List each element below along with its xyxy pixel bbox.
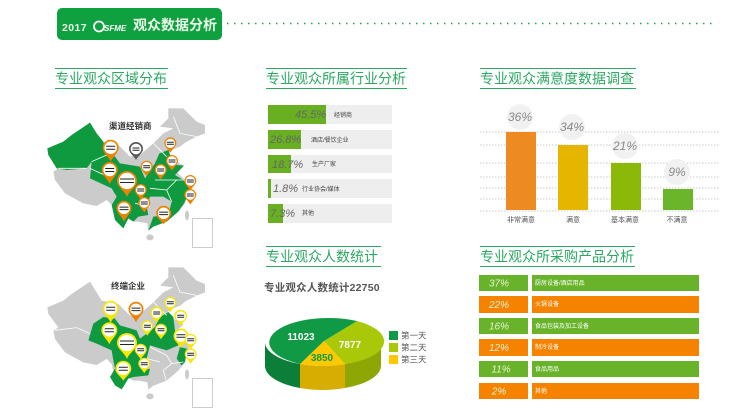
pie chart: visitors by day: 11023 — [287, 332, 315, 343]
heading: region distribution: 专业观众区域分布 — [55, 70, 167, 86]
column: satisfied — [558, 114, 588, 224]
row 2: 火锅设备 — [535, 300, 559, 308]
map: channel dealers — [47, 108, 213, 248]
inset: south china sea — [192, 378, 212, 408]
heading: purchased products: 专业观众所采购产品分析 — [480, 248, 634, 264]
heading: industry analysis: 专业观众所属行业分析 — [266, 70, 406, 86]
row: other: 其他 — [302, 209, 314, 217]
legend: days: 第二天 — [401, 342, 427, 352]
china base map — [47, 108, 205, 240]
column: very satisfied: 36% — [508, 110, 532, 124]
column: satisfied: 34% — [560, 120, 584, 134]
row 4: 制冷设备 — [535, 343, 559, 351]
header banner: SFME — [104, 24, 127, 33]
row 5 — [479, 361, 699, 377]
label: 终端企业 — [111, 281, 146, 291]
map pins — [102, 137, 196, 224]
column: not satisfied: 9% — [668, 165, 686, 179]
header banner — [57, 8, 222, 40]
row: dealers: 45.5% — [295, 109, 326, 121]
row 1: 37% — [489, 278, 509, 290]
label: 渠道经销商 — [109, 121, 152, 131]
row: other — [268, 204, 392, 223]
row 6 — [479, 383, 699, 399]
pie chart: visitors by day: 7877 — [339, 340, 362, 351]
row 1: 厨房设备/酒店用品 — [535, 279, 585, 287]
pie chart: visitors by day — [265, 318, 384, 390]
table: purchased products — [479, 275, 699, 399]
row: manufacturers: 生产厂家 — [312, 160, 336, 168]
row: associations and media: 1.8% — [273, 183, 298, 195]
map: end-user companies — [47, 267, 213, 408]
column: satisfied: 满意 — [566, 215, 580, 224]
dotted header rule — [227, 22, 715, 24]
legend: days: 第三天 — [401, 354, 427, 364]
column: not satisfied — [663, 159, 693, 224]
column: basically satisfied: 21% — [612, 139, 637, 153]
row: associations and media: 行业协会/媒体 — [302, 185, 340, 193]
province borders — [58, 117, 197, 207]
subheading: total visitors: 专业观众人数统计22750 — [264, 281, 380, 294]
legend: days — [389, 330, 427, 364]
column: very satisfied — [506, 104, 536, 224]
row 4 — [479, 339, 699, 356]
row 5: 食品用品 — [535, 365, 559, 373]
row 5: 11% — [491, 364, 511, 376]
heading: visitor count: 专业观众人数统计 — [266, 248, 378, 264]
row 1 — [479, 275, 699, 291]
bar chart: industry — [268, 105, 392, 223]
row: hotels and catering: 酒店/餐饮企业 — [311, 136, 349, 144]
row 4: 12% — [489, 343, 509, 354]
inset: south china sea — [192, 218, 212, 248]
row 6: 其他 — [535, 387, 547, 395]
row 3 — [479, 318, 699, 334]
column: very satisfied: 非常满意 — [507, 215, 535, 224]
row: associations and media — [268, 179, 392, 198]
green provinces — [47, 123, 190, 231]
row: hotels and catering — [268, 130, 392, 149]
row: other: 7.3% — [270, 208, 295, 220]
column: not satisfied: 不满意 — [666, 215, 688, 224]
row: dealers: 经销商 — [334, 111, 352, 119]
china base map — [47, 267, 205, 399]
row: manufacturers — [268, 155, 392, 173]
row: dealers — [268, 105, 392, 124]
province borders — [55, 275, 197, 382]
row 6: 2% — [491, 386, 506, 398]
row 3: 16% — [489, 322, 509, 332]
row 2: 22% — [488, 300, 509, 311]
header banner: 观众数据分析 — [133, 17, 217, 33]
green provinces — [88, 312, 187, 389]
column: basically satisfied: 基本满意 — [611, 215, 639, 224]
row: manufacturers: 18.7% — [272, 159, 303, 171]
row: hotels and catering: 26.8% — [269, 134, 301, 146]
map pins — [101, 297, 197, 381]
legend: days: 第一天 — [401, 330, 427, 340]
header banner: 2017 — [62, 22, 87, 34]
row 2 — [479, 296, 699, 313]
column: basically satisfied — [611, 133, 641, 224]
column chart: satisfaction — [480, 104, 720, 224]
pie chart: visitors by day: 3850 — [311, 353, 334, 364]
heading: satisfaction survey: 专业观众满意度数据调查 — [480, 70, 634, 86]
row 3: 食品包装及加工设备 — [535, 322, 589, 330]
